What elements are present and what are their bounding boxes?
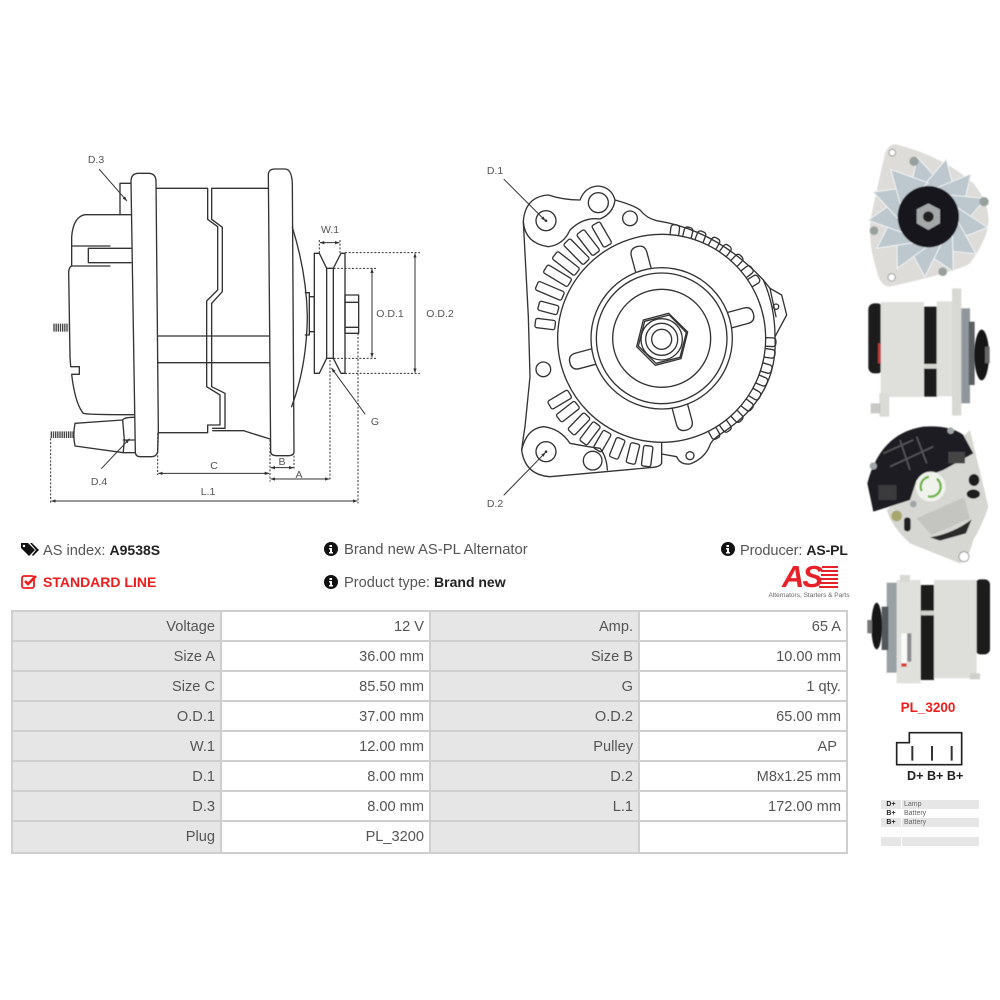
mounting lobes [522, 200, 776, 470]
front view technical drawing [504, 179, 787, 495]
side view labels: A [295, 469, 303, 481]
producer text: Producer: AS-PL [740, 542, 848, 559]
row: size A and size B: 36.00 mm [359, 649, 424, 665]
AS index text: AS index: A9538S [43, 542, 160, 559]
photo: side of alternator, pulley right [868, 288, 990, 417]
logo: AS-PL [768, 559, 850, 599]
side view labels: O.D.1 [376, 308, 404, 320]
row: voltage and amperage [13, 612, 846, 640]
row: D.1 and D.2: D.2 [610, 769, 633, 785]
left lower vent slots [547, 390, 653, 467]
product type text: Product type: Brand new [344, 574, 506, 591]
row: size A and size B: 10.00 mm [776, 649, 841, 665]
main round housing [558, 234, 766, 442]
photo: side of alternator, pulley left [867, 575, 990, 683]
row: D.3 and L.1: 8.00 mm [367, 799, 424, 815]
rear flange [131, 173, 158, 457]
stator housing outlines [156, 188, 271, 439]
row: size C and G: 85.50 mm [359, 679, 424, 695]
pulley with nut [305, 253, 359, 373]
row: W.1 and pulley: 12.00 mm [359, 739, 424, 755]
row: voltage and amperage: Amp. [599, 619, 633, 635]
plug legend table [881, 800, 979, 846]
hub circles [591, 268, 732, 409]
rear cover [69, 183, 135, 415]
row: O.D.1 and O.D.2: 65.00 mm [776, 709, 841, 725]
row: voltage and amperage: 12 V [394, 619, 424, 635]
row: O.D.1 and O.D.2: O.D.2 [595, 709, 633, 725]
side view technical drawing [51, 169, 420, 503]
row: D.1 and D.2: 8.00 mm [367, 769, 424, 785]
leader arrows [504, 179, 545, 495]
side view labels: D.3 [88, 154, 104, 166]
side view labels: L.1 [201, 486, 215, 498]
photo: rear of alternator [867, 426, 988, 563]
row: W.1 and pulley: W.1 [190, 739, 215, 755]
row: size C and G: Size C [172, 679, 215, 695]
icon: tags [21, 543, 39, 556]
icon: info [324, 542, 338, 556]
standard line label: STANDARD LINE [43, 574, 156, 590]
side view labels: C [210, 460, 218, 472]
front flange [268, 169, 294, 456]
plug title: PL_3200 [901, 700, 955, 715]
plug legend table: Lamp [904, 801, 922, 808]
side view labels: B [278, 456, 286, 468]
row: size C and G: G [622, 679, 633, 695]
row: D.1 and D.2 [13, 762, 846, 790]
side view labels: W.1 [321, 224, 339, 236]
front cover dome [292, 227, 307, 407]
row: O.D.1 and O.D.2: 37.00 mm [359, 709, 424, 725]
row: D.3 and L.1 [13, 792, 846, 820]
row: D.1 and D.2: M8x1.25 mm [757, 769, 841, 785]
row: plug: Plug [186, 829, 215, 845]
side view labels: G [371, 416, 379, 428]
hex nut [637, 313, 688, 365]
row: voltage and amperage: Voltage [166, 619, 215, 635]
row: D.3 and L.1: L.1 [613, 799, 633, 815]
icon: info [324, 575, 338, 589]
plug legend table: Battery [904, 810, 926, 817]
plug legend table: Battery [904, 819, 926, 826]
row: D.1 and D.2: D.1 [192, 769, 215, 785]
row: size A and size B [13, 642, 846, 670]
row: plug [13, 822, 846, 852]
row: W.1 and pulley: AP [817, 739, 837, 755]
housing outline [522, 186, 787, 477]
row: size C and G: 1 qty. [806, 679, 841, 695]
row: voltage and amperage: 65 A [812, 619, 841, 635]
description text: Brand new AS-PL Alternator [344, 542, 528, 558]
row: O.D.1 and O.D.2: O.D.1 [177, 709, 215, 725]
specification table [11, 610, 848, 854]
right vent notches [670, 224, 776, 440]
plug legend table: B+ [886, 810, 896, 817]
row: D.3 and L.1: D.3 [192, 799, 215, 815]
logo: AS-PL: AS [782, 559, 821, 594]
side view labels: O.D.2 [426, 308, 454, 320]
side view labels: D.4 [91, 476, 107, 488]
leader arrows [99, 169, 365, 468]
row: W.1 and pulley: Pulley [593, 739, 633, 755]
logo: AS-PL: Alternators, Starters & Parts [769, 592, 849, 599]
left upper vent slots [535, 221, 612, 330]
dimension lines [51, 240, 420, 503]
plug legend table: B+ [886, 819, 896, 826]
mounting holes [536, 193, 779, 470]
row: W.1 and pulley [13, 732, 846, 760]
icon: info [721, 542, 735, 556]
rear stud [53, 316, 69, 340]
row: size C and G [13, 672, 846, 700]
four spokes [568, 244, 755, 432]
row: D.3 and L.1: 172.00 mm [768, 799, 841, 815]
plug terminal labels: D+ B+ B+ [907, 769, 963, 783]
terminal with long bolt [51, 417, 135, 453]
front view labels: D.1 [487, 165, 503, 177]
row: O.D.1 and O.D.2 [13, 702, 846, 730]
row: plug: PL_3200 [366, 829, 424, 845]
front view labels [487, 165, 503, 510]
row: size A and size B: Size B [591, 649, 633, 665]
photo: front of alternator [867, 144, 991, 287]
front view labels: D.2 [487, 498, 503, 510]
row: size A and size B: Size A [174, 649, 215, 665]
icon: red checkbox [21, 575, 37, 589]
side view labels [88, 154, 454, 498]
plug legend table: D+ [886, 801, 896, 808]
plug diagram [897, 733, 962, 765]
